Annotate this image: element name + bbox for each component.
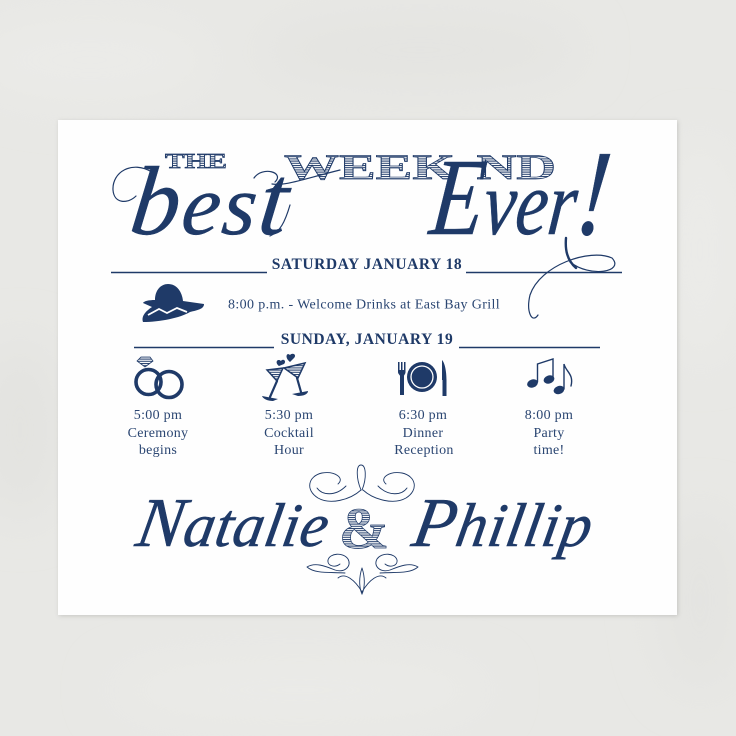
event: cocktail: Hour bbox=[274, 443, 304, 458]
event: party bbox=[525, 408, 573, 458]
couple names bbox=[130, 484, 600, 562]
event: cocktail: 5:30 pm bbox=[265, 408, 313, 423]
flourish: top ornament bbox=[310, 465, 414, 501]
event: dinner: Reception bbox=[394, 443, 454, 458]
script name: Natalie: Natalie bbox=[130, 484, 336, 562]
swash on Ever bbox=[529, 255, 615, 318]
icon: music notes bbox=[526, 359, 572, 396]
event: party: 8:00 pm bbox=[525, 408, 573, 423]
flourish: bottom ornament bbox=[307, 554, 418, 594]
event: cocktail bbox=[264, 408, 314, 458]
tail of r bbox=[566, 238, 576, 268]
icon: cocktail glasses bbox=[262, 354, 308, 401]
event: ceremony: 5:00 pm bbox=[134, 408, 182, 423]
event: ceremony bbox=[128, 408, 188, 458]
date heading: Sunday: SUNDAY, JANUARY 19 bbox=[281, 331, 453, 348]
date heading: Saturday: SATURDAY JANUARY 18 bbox=[272, 256, 462, 273]
icon: plate and cutlery bbox=[398, 360, 446, 396]
engraved word: THE: THE bbox=[165, 149, 227, 173]
card shadow bbox=[59, 121, 678, 616]
icon: wedding rings bbox=[136, 357, 182, 398]
engraved word: WEEKEND: WEEK ND bbox=[284, 147, 556, 187]
swash on best bbox=[113, 167, 340, 236]
script word: best: best bbox=[125, 145, 297, 256]
event: ceremony: begins bbox=[139, 443, 177, 458]
engraved ampersand: & bbox=[339, 496, 389, 561]
event: party: Party bbox=[533, 426, 565, 441]
title: the best weekend ever bbox=[113, 126, 617, 318]
event: welcome drinks: 8:00 p.m. - Welcome Drinks at East Bay Grill bbox=[228, 298, 500, 312]
event: dinner: 6:30 pm bbox=[399, 408, 447, 423]
event: dinner bbox=[394, 408, 454, 458]
event: party: time! bbox=[533, 443, 565, 458]
event: ceremony: Ceremony bbox=[128, 426, 188, 441]
script word: Ever!: Ever! bbox=[424, 126, 617, 261]
event: cocktail: Cocktail bbox=[264, 426, 314, 441]
white card bbox=[58, 120, 677, 615]
icon: sombrero bbox=[143, 284, 204, 322]
script name: Phillip: Phillip bbox=[406, 484, 600, 562]
event: dinner: Dinner bbox=[403, 426, 443, 441]
